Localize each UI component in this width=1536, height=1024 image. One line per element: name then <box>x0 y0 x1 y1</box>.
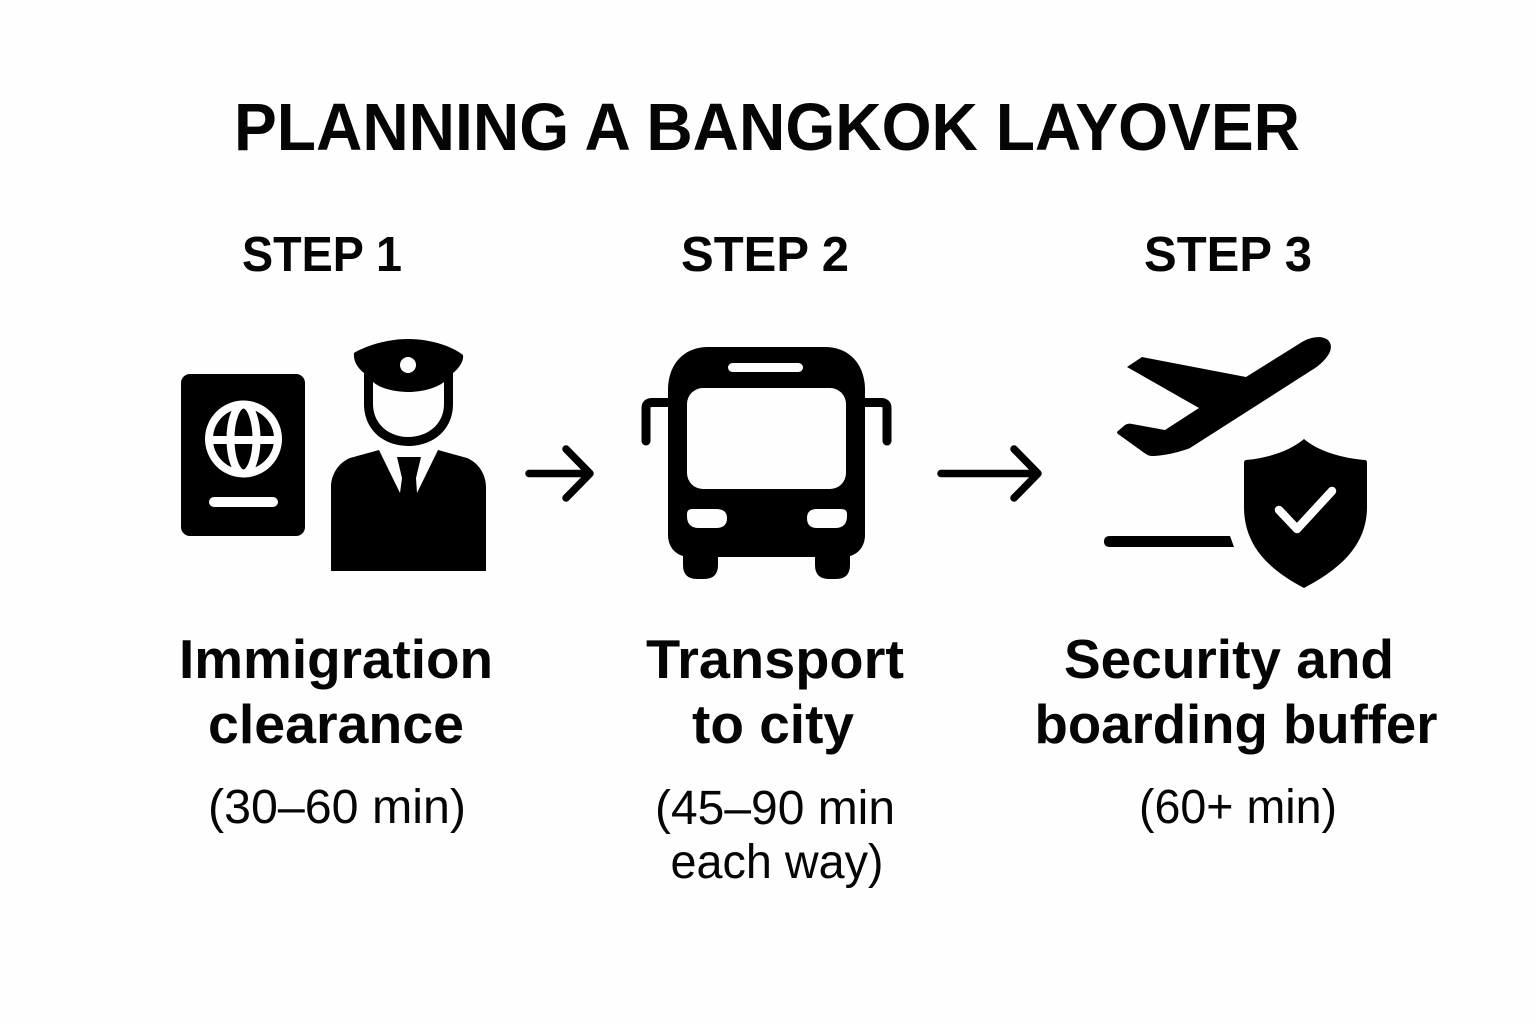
arrow: step 2 to step 3 <box>941 449 1038 498</box>
step 1 label: STEP 1 <box>242 228 402 282</box>
icon: runway line <box>1104 536 1234 547</box>
step 2 duration: each way) <box>670 836 884 889</box>
icon: plane taking off <box>1117 337 1331 456</box>
step 3 heading: boarding buffer <box>1034 693 1438 755</box>
step 1 heading <box>179 628 493 755</box>
step 1 heading: clearance <box>208 693 464 755</box>
step 2 duration <box>655 782 895 889</box>
arrow: step 1 to step 2 <box>529 449 590 498</box>
step 2 heading <box>646 628 904 755</box>
step 3 duration: (60+ min) <box>1139 781 1337 834</box>
step 1 heading: Immigration <box>179 628 493 690</box>
step 2 heading: Transport <box>646 628 904 690</box>
step 2 heading: to city <box>692 693 854 755</box>
icon: immigration officer <box>331 339 486 571</box>
title: PLANNING A BANGKOK LAYOVER <box>234 90 1300 165</box>
step 2 label: STEP 2 <box>681 228 849 282</box>
step 3 label: STEP 3 <box>1144 228 1312 282</box>
icon: security shield with check <box>1244 439 1367 588</box>
step 3 heading: Security and <box>1064 628 1394 690</box>
step 2 duration: (45–90 min <box>655 782 895 835</box>
step 3 heading <box>1034 628 1438 755</box>
step 1 duration: (30–60 min) <box>208 781 466 834</box>
icon: bus <box>646 347 887 579</box>
icon: passport <box>181 374 305 536</box>
